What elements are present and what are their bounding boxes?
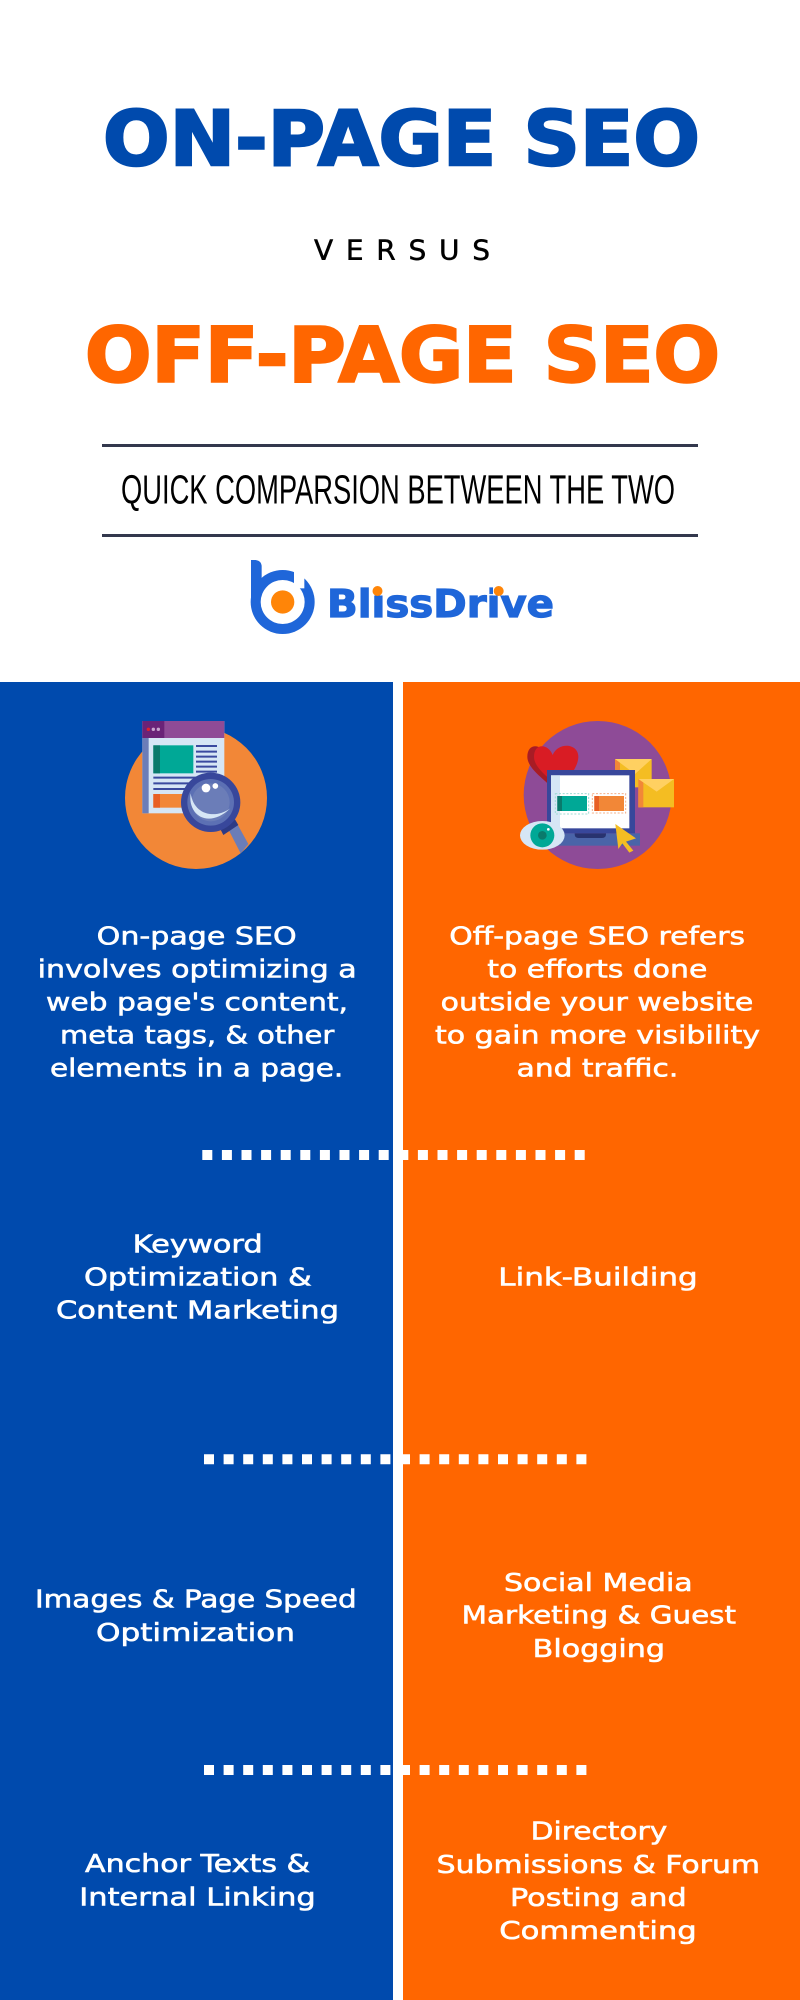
text: off-page definition: to efforts done [487, 954, 707, 983]
text: off-page definition [435, 921, 760, 1082]
text: keyword optimization: Keyword [133, 1229, 263, 1258]
text: keyword optimization [56, 1229, 339, 1324]
text: on-page definition: On-page SEO [97, 921, 297, 950]
subtitle with rules [102, 444, 698, 537]
icon: monitor with heart, mail, eye [520, 721, 674, 869]
text: on-page definition: elements in a page. [50, 1053, 343, 1082]
dotted divider 2 [204, 1454, 587, 1464]
text: keyword optimization: Content Marketing [56, 1295, 339, 1324]
text: off-page definition: Off-page SEO refers [449, 921, 745, 950]
panel: on-page [0, 682, 393, 2000]
text: off-page definition: to gain more visibility [435, 1020, 760, 1049]
text: link-building: Link-Building [498, 1262, 698, 1291]
panel: off-page [403, 682, 800, 2000]
title: on-page seo: ON-PAGE SEO [103, 94, 700, 183]
versus label: VERSUS [314, 234, 490, 266]
text: directory submissions: Commenting [499, 1916, 697, 1945]
text: anchor texts: Internal Linking [79, 1882, 316, 1911]
title: off-page seo: OFF-PAGE SEO [85, 310, 720, 400]
text: on-page definition: web page's content, [46, 987, 348, 1016]
text: on-page definition: involves optimizing a [38, 954, 357, 983]
icon: logo mark [251, 560, 315, 634]
text: directory submissions: Posting and [510, 1883, 687, 1912]
text: directory submissions: Submissions & Forum [437, 1850, 760, 1879]
icon: web page with magnifier [125, 721, 267, 869]
text: images and page speed: Optimization [96, 1618, 295, 1647]
logo: bliss drive [251, 560, 554, 634]
text: keyword optimization: Optimization & [84, 1262, 312, 1291]
text: images and page speed [35, 1585, 357, 1647]
text: images and page speed: Images & Page Speed [35, 1585, 357, 1614]
text: directory submissions: Directory [531, 1817, 668, 1846]
text: social media [462, 1568, 736, 1663]
text: anchor texts [79, 1849, 316, 1911]
text: on-page definition [38, 921, 357, 1082]
text: anchor texts: Anchor Texts & [85, 1849, 310, 1878]
text: off-page definition: and traffic. [517, 1053, 678, 1082]
dotted divider 1 [202, 1150, 585, 1160]
text: on-page definition: meta tags, & other [60, 1020, 335, 1049]
wordmark: BlissDrive [327, 582, 554, 626]
text: directory submissions [437, 1817, 760, 1945]
text: off-page definition: outside your website [441, 987, 753, 1016]
dotted divider 3 [204, 1765, 587, 1775]
text: social media: Social Media [504, 1568, 693, 1597]
text: social media: Blogging [533, 1634, 665, 1663]
text: social media: Marketing & Guest [462, 1601, 736, 1630]
